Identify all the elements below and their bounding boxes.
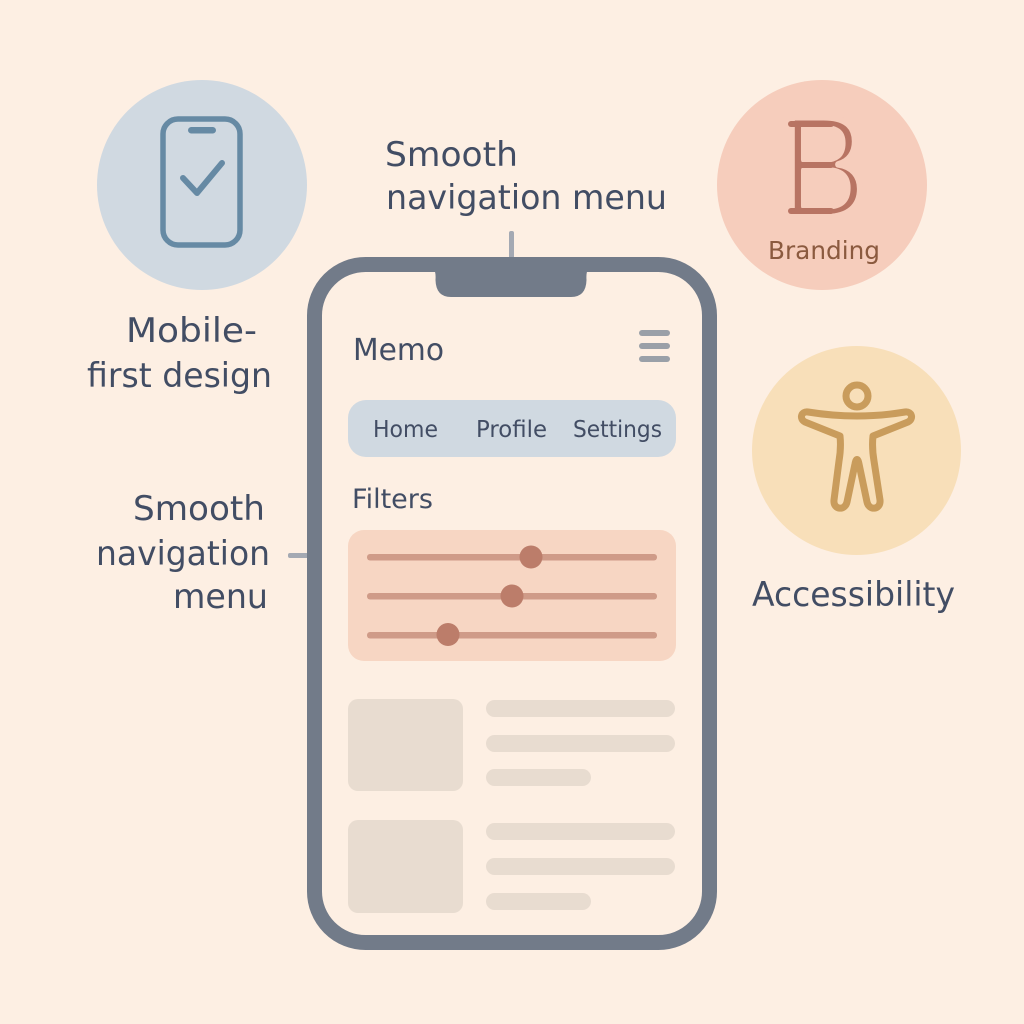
phone notch — [434, 270, 588, 297]
icon: hamburger menu — [639, 330, 670, 362]
label: mobile-first design: first design — [87, 356, 272, 395]
label: smooth navigation menu top: Smooth — [385, 135, 518, 174]
slider 3 — [367, 623, 657, 646]
label: smooth navigation menu top — [385, 135, 667, 217]
icon: branding circle: B — [782, 86, 866, 248]
filters heading: Filters — [352, 484, 433, 515]
phone — [314, 264, 710, 942]
slider 1 — [367, 546, 657, 568]
icon: branding circle — [717, 80, 927, 290]
connector: top — [509, 231, 514, 259]
label: accessibility: Accessibility — [752, 575, 955, 614]
label: smooth navigation menu left: Smooth — [133, 489, 265, 528]
content card 2 — [348, 820, 675, 913]
label: mobile-first design — [87, 311, 272, 395]
navigation bar: Home — [373, 417, 438, 443]
icon: accessibility circle — [752, 346, 961, 555]
connector: left — [288, 553, 310, 558]
label: smooth navigation menu top: navigation menu — [386, 178, 667, 217]
label: smooth navigation menu left — [96, 489, 270, 616]
icon: branding circle: Branding — [768, 236, 880, 265]
navigation bar: Profile — [476, 417, 547, 443]
filters panel — [348, 530, 676, 661]
label: smooth navigation menu left: navigation — [96, 534, 270, 573]
phone frame — [314, 264, 710, 942]
slider 2 — [367, 584, 657, 608]
navigation bar: Settings — [573, 417, 662, 443]
label: mobile-first design: Mobile- — [126, 311, 257, 350]
icon: mobile-first circle — [97, 80, 307, 290]
label: smooth navigation menu left: menu — [173, 577, 268, 616]
navigation bar — [348, 400, 676, 457]
app title: Memo — [353, 333, 444, 368]
content card 1 — [348, 699, 675, 791]
